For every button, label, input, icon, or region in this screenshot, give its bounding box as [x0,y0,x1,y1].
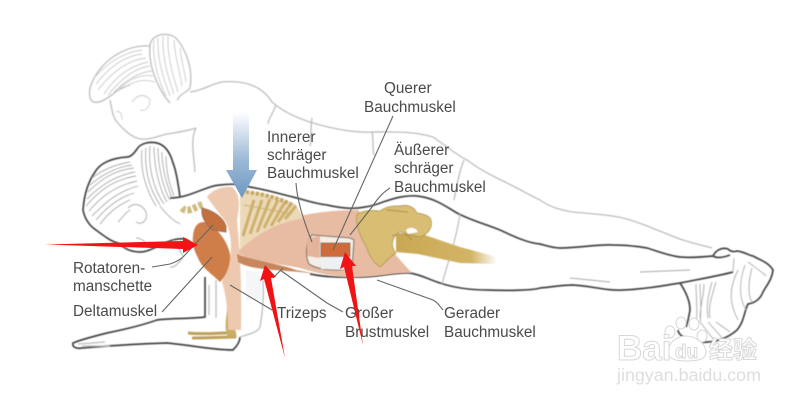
label: Querer Bauchmuskel: Querer [384,80,432,97]
watermark: Baidu jingyan: 经验 [709,336,757,364]
label: Innerer schräger Bauchmuskel: Innerer [267,129,315,146]
foot detail stroke continues [713,255,730,257]
icon: pelvis and femur bone [357,205,497,267]
label: Gerader Bauchmuskel: Gerader [444,305,500,322]
label: Äußerer schräger Bauchmuskel: schräger [394,160,454,177]
transverse muscle window [321,243,350,257]
label: Rotatorenmanschette: Rotatoren- [73,260,145,277]
label: Innerer schräger Bauchmuskel: schräger [267,147,327,164]
label: Innerer schräger Bauchmuskel: Bauchmuskel [267,165,359,182]
figure: lower plank body outline [170,184,773,342]
label: Deltamuskel: Deltamuskel [73,303,157,320]
figure: forearm and hand [73,240,263,350]
watermark: Baidu jingyan: jingyan.baidu.com [616,365,761,385]
pectoral band [237,254,317,274]
label: Rotatorenmanschette: manschette [73,278,152,295]
panel: anatomical torso muscles [182,187,412,330]
arrow: red middle arrow [260,265,285,358]
label: Trizeps: Trizeps [277,305,327,322]
rotator cuff [202,208,226,232]
watermark: Baidu jingyan: Bai [617,329,671,368]
label: Gerader Bauchmuskel: Bauchmuskel [444,324,536,341]
watermark: Baidu jingyan: du [675,342,698,363]
label: Querer Bauchmuskel: Bauchmuskel [364,99,456,116]
leader lines [152,116,443,312]
watermark: Baidu jingyan [616,317,761,385]
figure: upper plank position (ghost outline) [90,34,712,248]
figure: lower head and hair [83,142,190,252]
cut-away window [307,235,354,270]
arrow: red left arrow [45,237,198,253]
label: Äußerer schräger Bauchmuskel: Bauchmuskel [394,179,486,196]
label: Großer Brustmuskel: Großer [345,305,393,322]
label: Äußerer schräger Bauchmuskel: Äußerer [394,142,449,159]
deltoid [193,222,230,282]
label: Großer Brustmuskel: Brustmuskel [345,324,429,341]
icon: blue downward arrow [226,112,257,198]
arrow: red right arrow [340,252,363,345]
ribs [243,199,296,236]
